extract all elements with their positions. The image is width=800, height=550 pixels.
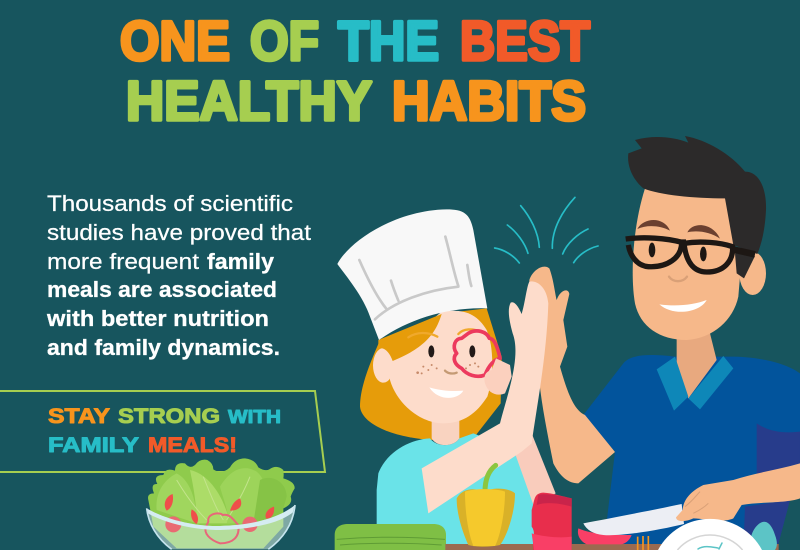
girl nose (445, 371, 457, 373)
table right (572, 544, 672, 550)
freckles (416, 362, 479, 374)
man shirt (583, 136, 800, 550)
man forearm and hand (676, 463, 800, 521)
callout banner: MEALS! (148, 433, 237, 457)
title: HEALTHY (126, 69, 372, 132)
cutting scene (572, 463, 800, 550)
girl (335, 209, 779, 550)
intro text block: studies have proved that (47, 220, 312, 245)
girl hair back (360, 308, 502, 440)
title: ONE (120, 9, 230, 72)
man hair (628, 136, 766, 254)
girl face (388, 311, 492, 423)
glasses (626, 238, 755, 272)
man ear (739, 252, 766, 295)
intro text block: more frequent (47, 249, 200, 274)
cucumber (335, 524, 446, 550)
callout banner: STAY (48, 404, 110, 428)
girl smile (429, 387, 463, 398)
salad bowl (147, 458, 295, 549)
intro text block: with better nutrition (46, 306, 269, 331)
eyebrows (637, 220, 720, 239)
girl ear (373, 348, 394, 383)
girl fringe (378, 314, 442, 361)
title: THE (338, 9, 439, 72)
callout banner: WITH (228, 406, 281, 427)
man (583, 136, 800, 550)
girl holding hand (484, 358, 512, 395)
man smile (659, 300, 707, 312)
callout banner (0, 391, 325, 472)
man raised arm (529, 267, 615, 483)
intro text block (46, 191, 312, 360)
yellow pepper (457, 465, 515, 547)
tomatoes (165, 494, 274, 524)
pepper ring (454, 331, 500, 376)
lettuce (148, 458, 295, 548)
callout banner: STRONG (118, 404, 220, 428)
title (120, 9, 590, 132)
red pepper slice (578, 528, 632, 545)
fork tines (638, 536, 648, 550)
man eyes (649, 243, 655, 257)
intro text block: and family dynamics. (47, 335, 280, 360)
girl hat (337, 209, 487, 340)
teal leaf (751, 522, 777, 550)
sideburn (735, 253, 755, 278)
knife (583, 504, 684, 535)
girl neck (432, 417, 459, 445)
girl far forearm (515, 433, 556, 507)
girl raised arm (422, 281, 548, 513)
plate logo (658, 519, 762, 550)
intro text block: meals are associated (47, 277, 277, 302)
intro text block: family (207, 249, 274, 274)
girl eyes (428, 345, 434, 357)
title: BEST (460, 9, 590, 72)
title: OF (250, 9, 319, 72)
man neck (677, 333, 717, 398)
girl shirt (377, 433, 534, 544)
glass bowl (147, 505, 295, 549)
intro text block: Thousands of scientific (47, 191, 293, 216)
table (445, 544, 779, 550)
man face (633, 188, 740, 340)
callout banner: FAMILY (48, 433, 139, 457)
collar (657, 357, 688, 411)
red pepper chunk (532, 493, 572, 550)
girl eyebrows (408, 329, 480, 337)
title: HABITS (392, 69, 586, 132)
man nose (669, 277, 687, 281)
high five sound lines (495, 197, 598, 263)
